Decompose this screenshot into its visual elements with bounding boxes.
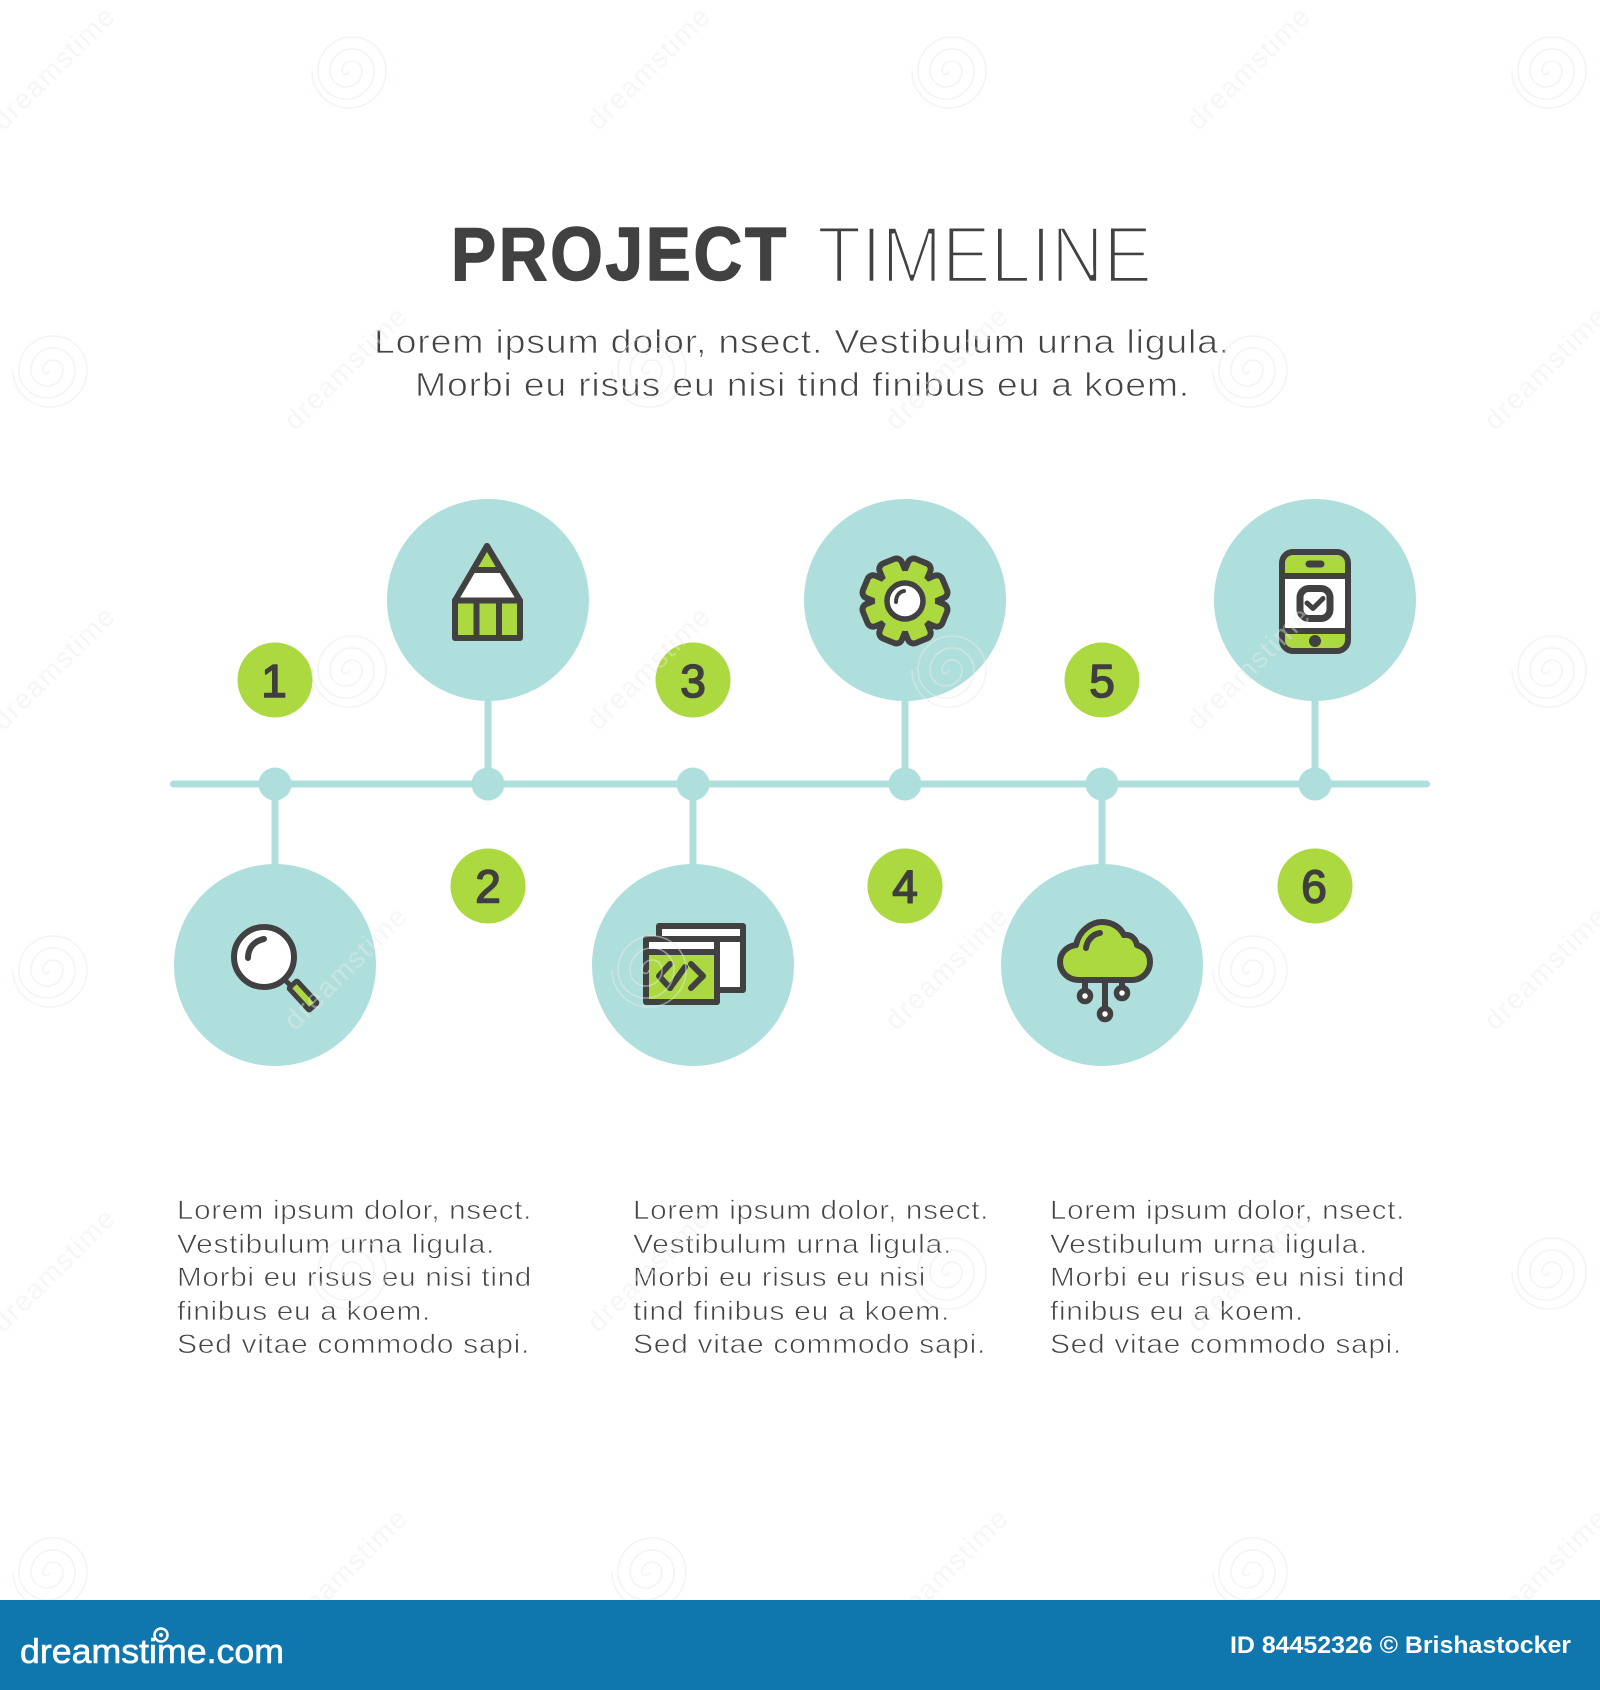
- number badge 6: [1278, 848, 1352, 924]
- watermark text: dreamstime: [581, 1, 716, 136]
- watermark text: dreamstime: [879, 301, 1014, 436]
- text column 3: Lorem ipsum dolor, nsect.: [1050, 1195, 1405, 1225]
- footer bar: [0, 1600, 1600, 1690]
- text column 2: Sed vitae commodo sapi.: [633, 1329, 986, 1359]
- watermark text: dreamstime: [1181, 1, 1316, 136]
- subtitle: Morbi eu risus eu nisi tind finibus eu a koem.: [415, 366, 1190, 403]
- title: TIMELINE: [817, 210, 1152, 300]
- number badge 5: 5: [1089, 655, 1115, 707]
- icon: code windows: [646, 926, 743, 1002]
- number badge 2: 2: [475, 860, 501, 912]
- text column 1: Morbi eu risus eu nisi tind: [177, 1262, 532, 1292]
- icon: cloud network: [1060, 922, 1150, 1020]
- number badge 2: [450, 848, 526, 924]
- icon: gear: [865, 561, 945, 641]
- step 6: mobile: [1214, 499, 1416, 701]
- text column 3: Sed vitae commodo sapi.: [1050, 1329, 1402, 1359]
- watermark text: dreamstime: [1181, 1203, 1316, 1338]
- text column 2: [633, 1195, 989, 1359]
- watermark text: dreamstime: [278, 901, 413, 1036]
- text column 3: Morbi eu risus eu nisi tind: [1050, 1262, 1405, 1292]
- timeline axis with stems and nodes: [170, 690, 1430, 874]
- number badge 3: 3: [680, 655, 706, 707]
- icon: phone with check: [1282, 552, 1348, 651]
- text column 2: Lorem ipsum dolor, nsect.: [633, 1195, 989, 1225]
- watermark text: dreamstime: [879, 1503, 1014, 1638]
- step 1: search: [174, 864, 376, 1066]
- watermark text: dreamstime: [278, 1503, 413, 1638]
- number badge 6: 6: [1301, 860, 1327, 912]
- watermark text: dreamstime: [879, 901, 1014, 1036]
- step 5: cloud: [1001, 864, 1203, 1066]
- number badge 1: [238, 642, 312, 718]
- text column 2: Morbi eu risus eu nisi: [633, 1262, 926, 1292]
- subtitle: [374, 323, 1230, 403]
- number badge 1: 1: [261, 655, 287, 707]
- text column 1: finibus eu a koem.: [177, 1296, 431, 1326]
- footer credit: ID 84452326 © Brishastocker: [1230, 1632, 1571, 1659]
- step 4: gear: [804, 499, 1006, 701]
- watermark text: dreamstime: [278, 301, 413, 436]
- subtitle: Lorem ipsum dolor, nsect. Vestibulum urna ligula.: [374, 323, 1230, 360]
- text column 1: [177, 1195, 532, 1359]
- text column 2: Vestibulum urna ligula.: [633, 1229, 952, 1259]
- number badge 3: [656, 642, 730, 718]
- step 3: code windows: [592, 864, 794, 1066]
- title: PROJECT: [451, 212, 789, 296]
- number badge 4: [868, 848, 942, 924]
- footer logo: dreamstime.com: [20, 1633, 284, 1671]
- text column 1: Lorem ipsum dolor, nsect.: [177, 1195, 532, 1225]
- text column 3: [1050, 1195, 1405, 1359]
- watermark text: dreamstime: [581, 601, 716, 736]
- text column 2: tind finibus eu a koem.: [633, 1296, 950, 1326]
- number badge 4: 4: [892, 860, 918, 912]
- watermark text: dreamstime: [1181, 601, 1316, 736]
- text column 3: Vestibulum urna ligula.: [1050, 1229, 1368, 1259]
- icon: magnifying glass: [234, 927, 317, 1010]
- text column 1: Vestibulum urna ligula.: [177, 1229, 495, 1259]
- watermark text: dreamstime: [581, 1203, 716, 1338]
- number badge 5: [1064, 642, 1140, 718]
- title: [451, 210, 1152, 300]
- text column 1: Sed vitae commodo sapi.: [177, 1329, 530, 1359]
- text column 3: finibus eu a koem.: [1050, 1296, 1304, 1326]
- icon: pencil: [455, 546, 520, 638]
- step 2: pencil: [387, 499, 589, 701]
